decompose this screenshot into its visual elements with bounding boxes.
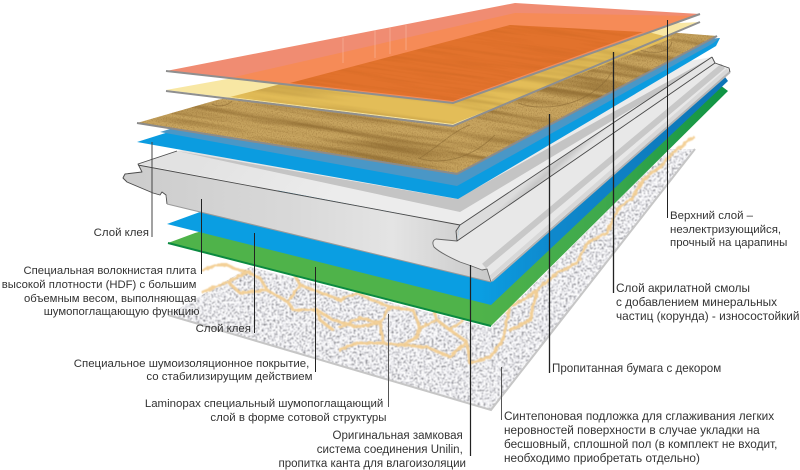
board bottom edge	[167, 204, 491, 282]
label: acoustic coating: Специальное шумоизоляционное покрытие,	[74, 358, 309, 370]
label: HDF board: высокой плотности (HDF) с большим	[2, 279, 196, 291]
label: Laminopax: слой в форме сотовой структуры	[210, 412, 386, 424]
label: adhesive layer lower: Слой клея	[196, 323, 251, 335]
label: HDF board: шумопоглащающую функцию	[44, 306, 200, 318]
honeycomb acoustic layer	[203, 137, 693, 363]
HDF board	[123, 57, 730, 282]
yellow grain	[252, 50, 629, 124]
golden part of resin layer	[230, 30, 672, 124]
label: Laminopax: Laminopax специальный шумопоглащающий	[145, 398, 383, 410]
label: adhesive layer upper: Слой клея	[94, 227, 149, 239]
middle orange band	[230, 13, 695, 102]
board top surface	[138, 57, 712, 225]
speckled synthetic padding	[169, 149, 694, 409]
label: underlay: бесшовный, сплошной пол (в комплект не входит,	[504, 437, 777, 451]
label: decor paper: Пропитанная бумага с декором	[552, 362, 721, 375]
green acoustic coating layer	[168, 85, 728, 326]
underlay layer	[160, 137, 705, 420]
top layer edge	[166, 14, 700, 103]
label: top layer: неэлектризующийся,	[670, 224, 781, 236]
shadow on board	[177, 57, 712, 212]
orange grain	[392, 30, 570, 76]
upper adhesive blue layer	[137, 38, 720, 199]
label: acrylic resin: с добавлением минеральных	[616, 295, 777, 309]
underlay edge	[168, 149, 695, 410]
lower lip of lock	[433, 63, 730, 282]
resin edge	[166, 22, 700, 126]
label: underlay: Синтепоновая подложка для сглаживания легких	[504, 409, 774, 423]
label: underlay: неровностей поверхности в случае укладки на	[504, 423, 760, 437]
wood edge	[137, 36, 717, 174]
label: Unilin lock: Оригинальная замковая	[333, 430, 463, 442]
label: acrylic resin: частиц (корунда) - износостойкий	[616, 309, 799, 323]
label: acrylic resin: Слой акрилатной смолы	[616, 281, 750, 295]
dark orange panel	[290, 25, 643, 101]
label: top layer: Верхний слой –	[670, 210, 754, 222]
leader lines	[152, 20, 668, 456]
lower adhesive blue layer	[167, 70, 728, 305]
resin layer yellow sheet	[166, 21, 700, 127]
lip grey stripes	[484, 66, 730, 281]
board front face with tongue and groove profile	[123, 165, 491, 282]
faint vertical highlights	[343, 25, 406, 63]
label: HDF board: объемным весом, выполняющая	[24, 293, 196, 305]
decor paper wood layer	[136, 32, 718, 175]
blue layer shadow band	[160, 38, 720, 186]
label: underlay: необходимо приобретать отдельно)	[504, 451, 700, 465]
label: Unilin lock: система соединения Unilin,	[317, 444, 463, 456]
upper groove strip	[457, 57, 715, 241]
wood grain	[140, 33, 715, 173]
board contour lines	[123, 57, 730, 282]
label: Unilin lock: пропитка канта для влагоизоляции	[278, 458, 466, 470]
top protective orange layer	[166, 3, 700, 104]
label: acoustic coating: со стабилизирущим действием	[146, 371, 313, 383]
label: top layer: прочный на царапины	[670, 237, 787, 249]
green layer dark edge	[168, 243, 491, 326]
label: HDF board: Специальная волокнистая плита	[23, 265, 197, 277]
